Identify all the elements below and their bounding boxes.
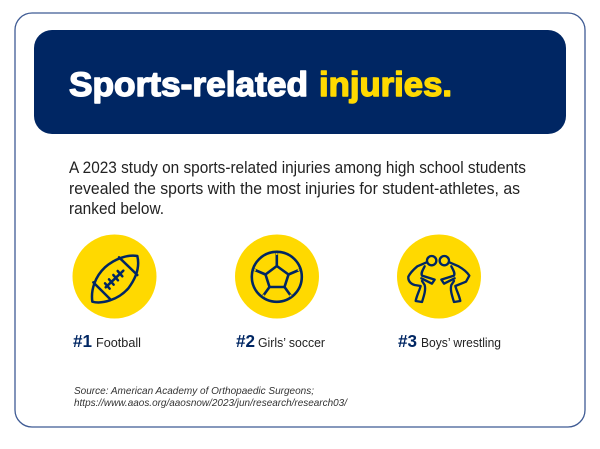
title highlight: injuries. bbox=[319, 66, 452, 104]
intro text bbox=[69, 159, 526, 218]
label: Boys' wrestling: Boys’ wrestling bbox=[421, 336, 501, 350]
label: Football: #1 bbox=[73, 331, 92, 351]
intro text: revealed the sports with the most injuries for student-athletes, as bbox=[69, 180, 520, 198]
panel: title banner bbox=[34, 30, 566, 134]
source note: https://www.aaos.org/aaosnow/2023/jun/research/research03/ bbox=[74, 397, 348, 409]
intro text: ranked below. bbox=[69, 200, 164, 218]
icon: wrestlers bbox=[397, 234, 481, 318]
title: Sports-related bbox=[69, 66, 308, 104]
source note bbox=[74, 385, 348, 409]
icon: football bbox=[72, 234, 156, 318]
label: Football: Football bbox=[96, 336, 141, 350]
label: Girls' soccer: #2 bbox=[236, 331, 255, 351]
intro text: A 2023 study on sports-related injuries among high school students bbox=[69, 159, 526, 177]
source note: Source: American Academy of Orthopaedic Surgeons; bbox=[74, 385, 314, 397]
icon: soccer ball bbox=[235, 234, 319, 318]
label: Boys' wrestling: #3 bbox=[398, 331, 417, 351]
label: Football bbox=[73, 331, 141, 351]
label: Boys' wrestling bbox=[398, 331, 501, 351]
label: Girls' soccer: Girls’ soccer bbox=[258, 336, 325, 350]
label: Girls' soccer bbox=[236, 331, 325, 351]
